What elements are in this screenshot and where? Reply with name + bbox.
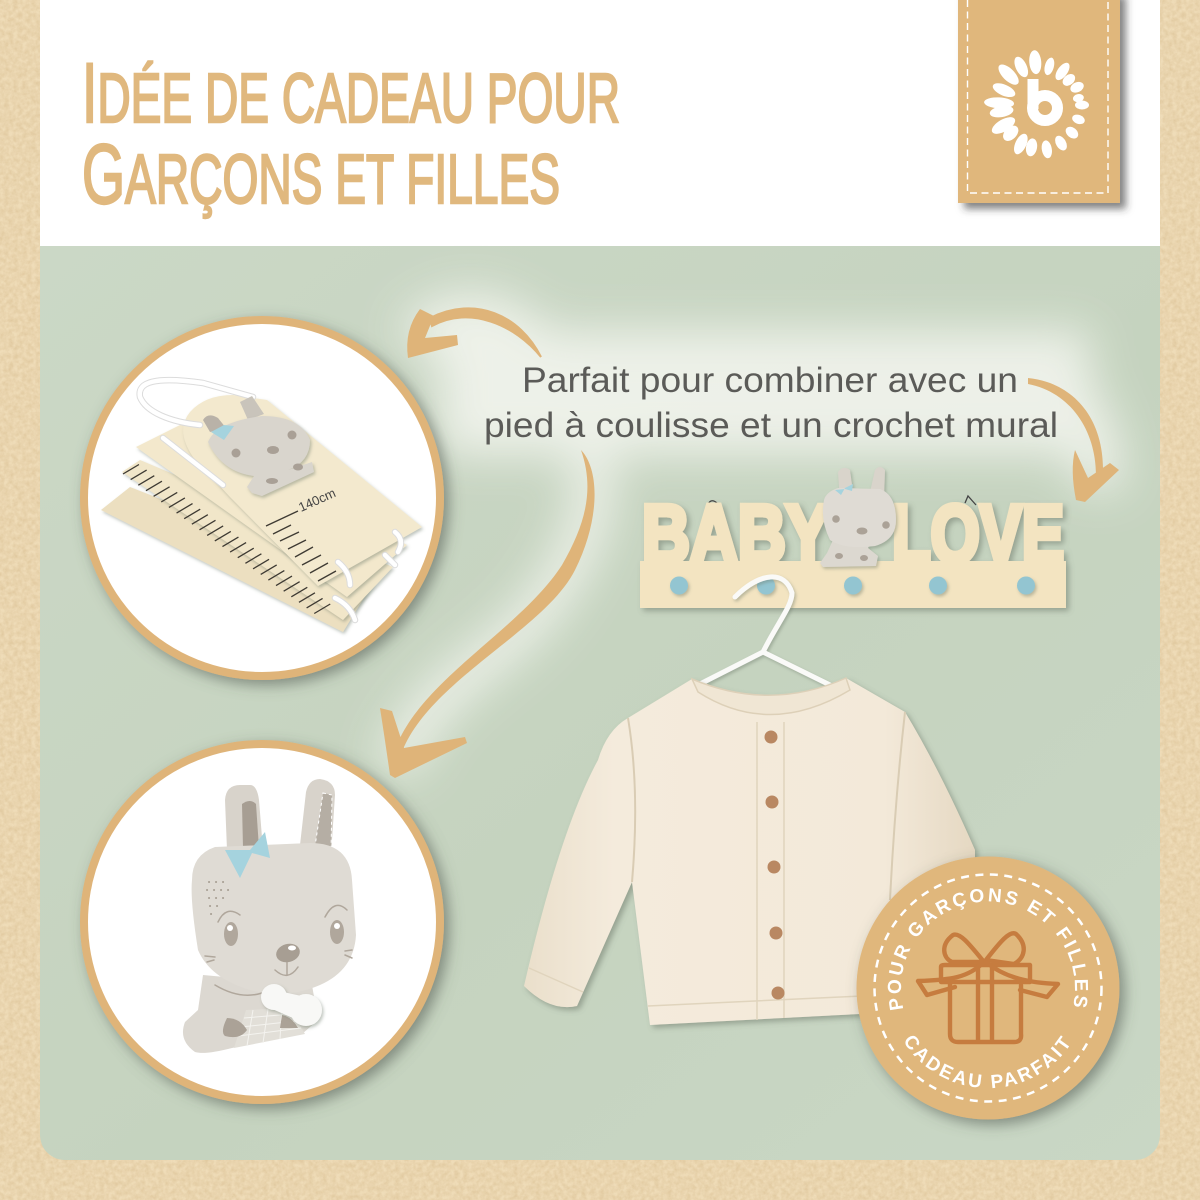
button placket: [757, 722, 784, 1020]
large bunny: [183, 779, 356, 1053]
blue bow: [225, 832, 270, 878]
ears: [225, 785, 263, 850]
cardigan body: [524, 678, 975, 1025]
cream cardigan: [524, 577, 975, 1025]
wall coat rack: [640, 467, 1066, 608]
top board ticks: [266, 511, 336, 581]
brows, whiskers and mouth: [205, 905, 352, 995]
header white band: [40, 0, 1160, 246]
callout text: [484, 361, 1058, 445]
sleeve seams and shading: [628, 712, 905, 900]
belly check pattern: [234, 1008, 305, 1048]
badge top text: POUR GARÇONS ET FILLES: [888, 888, 1088, 1010]
icon: brand flower logo: [984, 50, 1089, 159]
rack wood with letters: LOVE: [892, 489, 1064, 580]
cheek dots: [207, 882, 228, 914]
callout text: pied à coulisse et un crochet mural: [484, 406, 1058, 445]
badge bottom text: CADEAU PARFAIT: [905, 1035, 1069, 1088]
height chart boards: [101, 395, 422, 632]
neck ribbing: [692, 678, 850, 715]
arrow: to bunny hook: [380, 450, 595, 778]
rack wires: [707, 496, 976, 507]
icon: gift: [918, 933, 1058, 1042]
title line 1: IDÉE DE CADEAU POUR: [82, 46, 620, 140]
ruler ticks: [123, 464, 330, 614]
measurement label: 140cm: [296, 485, 338, 515]
title: [82, 46, 620, 221]
nose: [274, 941, 302, 965]
photo circle: height chart: [84, 320, 440, 676]
blue pegs: [670, 576, 1035, 594]
buttons: [764, 730, 784, 1000]
photo circle: bunny coat hook: [84, 744, 440, 1100]
arrow: to height chart: [407, 308, 541, 358]
rack wood with letters: [640, 489, 1066, 608]
rope: [140, 380, 401, 620]
dashed ring: [874, 874, 1102, 1102]
rack wood with letters: BABY: [642, 489, 830, 580]
body: [183, 975, 318, 1053]
rack bunny: [820, 467, 896, 567]
title line 2: GARÇONS ET FILLES: [82, 127, 560, 221]
paws: [223, 1018, 247, 1037]
callout text: Parfait pour combiner avec un: [522, 361, 1018, 400]
brand tag: [958, 0, 1120, 203]
sleeve cuff and hem ribbing: [529, 968, 862, 1006]
hanger: [700, 577, 830, 685]
tag stitching: [968, 0, 1108, 193]
eyes: [224, 920, 344, 946]
head: [192, 843, 356, 994]
light glow behind text and arrows: [395, 317, 1100, 770]
small bunny on chart: [203, 396, 314, 496]
green panel: [40, 246, 1160, 1160]
arrow: to wall hook: [1028, 378, 1119, 502]
white peg: [261, 984, 322, 1026]
badge: cadeau parfait: [853, 854, 1132, 1132]
